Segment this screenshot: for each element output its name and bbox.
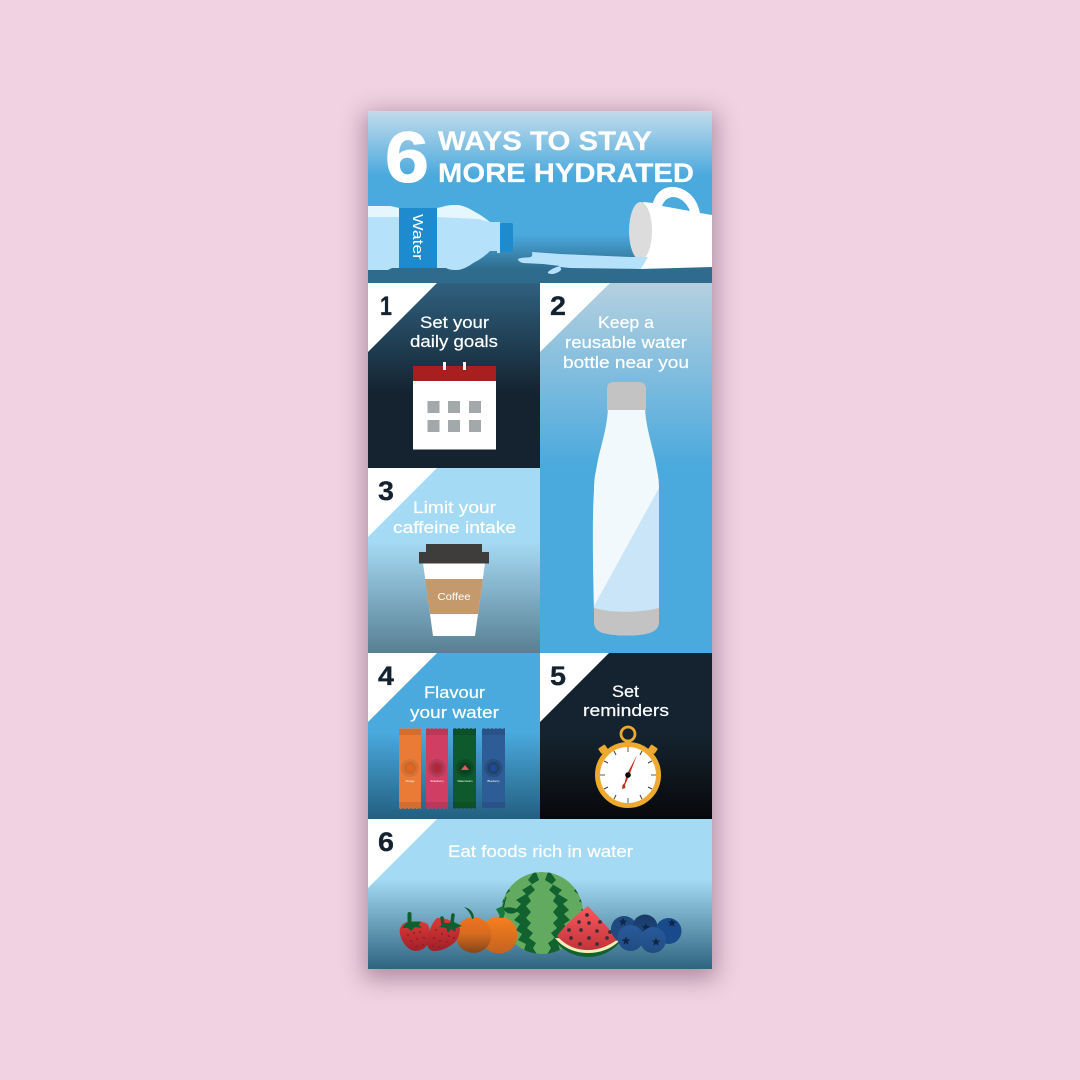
panel 5: set reminders [540,653,712,819]
sachet: blueberry [482,728,505,809]
heading: set your daily goals [410,314,498,351]
sachet: watermelon: Watermelon [458,779,473,783]
title: ways to stay more hydrated [438,126,694,188]
heading: set reminders: reminders [583,702,669,720]
heading: set your daily goals: daily goals [410,333,498,351]
corner badge 5: 5 [550,661,566,691]
heading: set reminders [583,683,669,720]
corner badge 6: 6 [378,827,394,857]
icon: stopwatch [598,727,658,806]
panel 3: limit caffeine [368,468,540,653]
heading: limit your caffeine intake: Limit your [413,499,497,517]
corner badge 4: 4 [378,661,394,691]
corner badge 4 [368,653,437,722]
icon: tipped water bottle [368,205,513,270]
icon: calendar [413,362,496,450]
heading: keep a reusable water bottle near you: bottle near you [563,354,689,372]
panel 6: foods rich in water [368,819,712,969]
corner badge 1 [368,283,437,352]
heading: limit your caffeine intake: caffeine intake [393,519,516,537]
icon: coffee cup: Coffee [438,591,471,603]
title number 6: 6 [385,119,429,198]
fruit group [400,872,682,957]
icon: coffee cup [419,544,489,636]
heading: set your daily goals: Set your [420,314,490,332]
sachet: blueberry: Blueberry [488,779,500,783]
heading: flavour your water [410,684,500,722]
corner badge 2 [540,283,610,352]
icon: blueberries [611,914,682,953]
panel 2: reusable bottle [540,283,712,653]
icon: strawberry left [400,914,430,951]
corner badge 3: 3 [378,476,394,506]
sachet: strawberry: Strawberry [430,779,444,783]
heading: eat foods rich in water: Eat foods rich in water [448,843,634,861]
icon: orange back [480,897,519,954]
title: ways to stay more hydrated: WAYS TO STAY [438,126,652,156]
sachet: watermelon [453,728,476,809]
heading: keep a reusable water bottle near you: Keep a [598,314,655,332]
corner badge 1: 1 [380,291,392,321]
corner badge 6 [368,819,437,888]
panel 4: flavour your water [368,653,540,819]
panel: header [368,111,712,283]
heading: limit your caffeine intake [393,499,516,537]
infographic card [368,111,712,969]
icon: tipped white cup [629,187,712,269]
panel 1: daily goals [368,283,540,468]
icon: tipped water bottle: Water [409,214,426,260]
corner badge 2: 2 [550,291,566,321]
heading: set reminders: Set [612,683,639,701]
icon: orange front [456,907,492,953]
icon: watermelon slice [553,906,621,957]
heading: keep a reusable water bottle near you: reusable water [565,334,688,352]
title: ways to stay more hydrated: MORE HYDRATED [438,158,694,188]
sachet: strawberry [426,728,448,809]
heading: flavour your water: Flavour [424,684,486,702]
heading: keep a reusable water bottle near you [563,314,689,372]
icon: whole watermelon [502,872,583,954]
sachet: orange: Orange [405,779,415,783]
sachet: orange [399,728,421,809]
corner badge 3 [368,468,437,537]
icon: strawberry right [427,915,462,951]
corner badge 5 [540,653,609,722]
spilled water [518,252,648,274]
icon: reusable water bottle [593,382,659,636]
heading: flavour your water: your water [410,704,500,722]
